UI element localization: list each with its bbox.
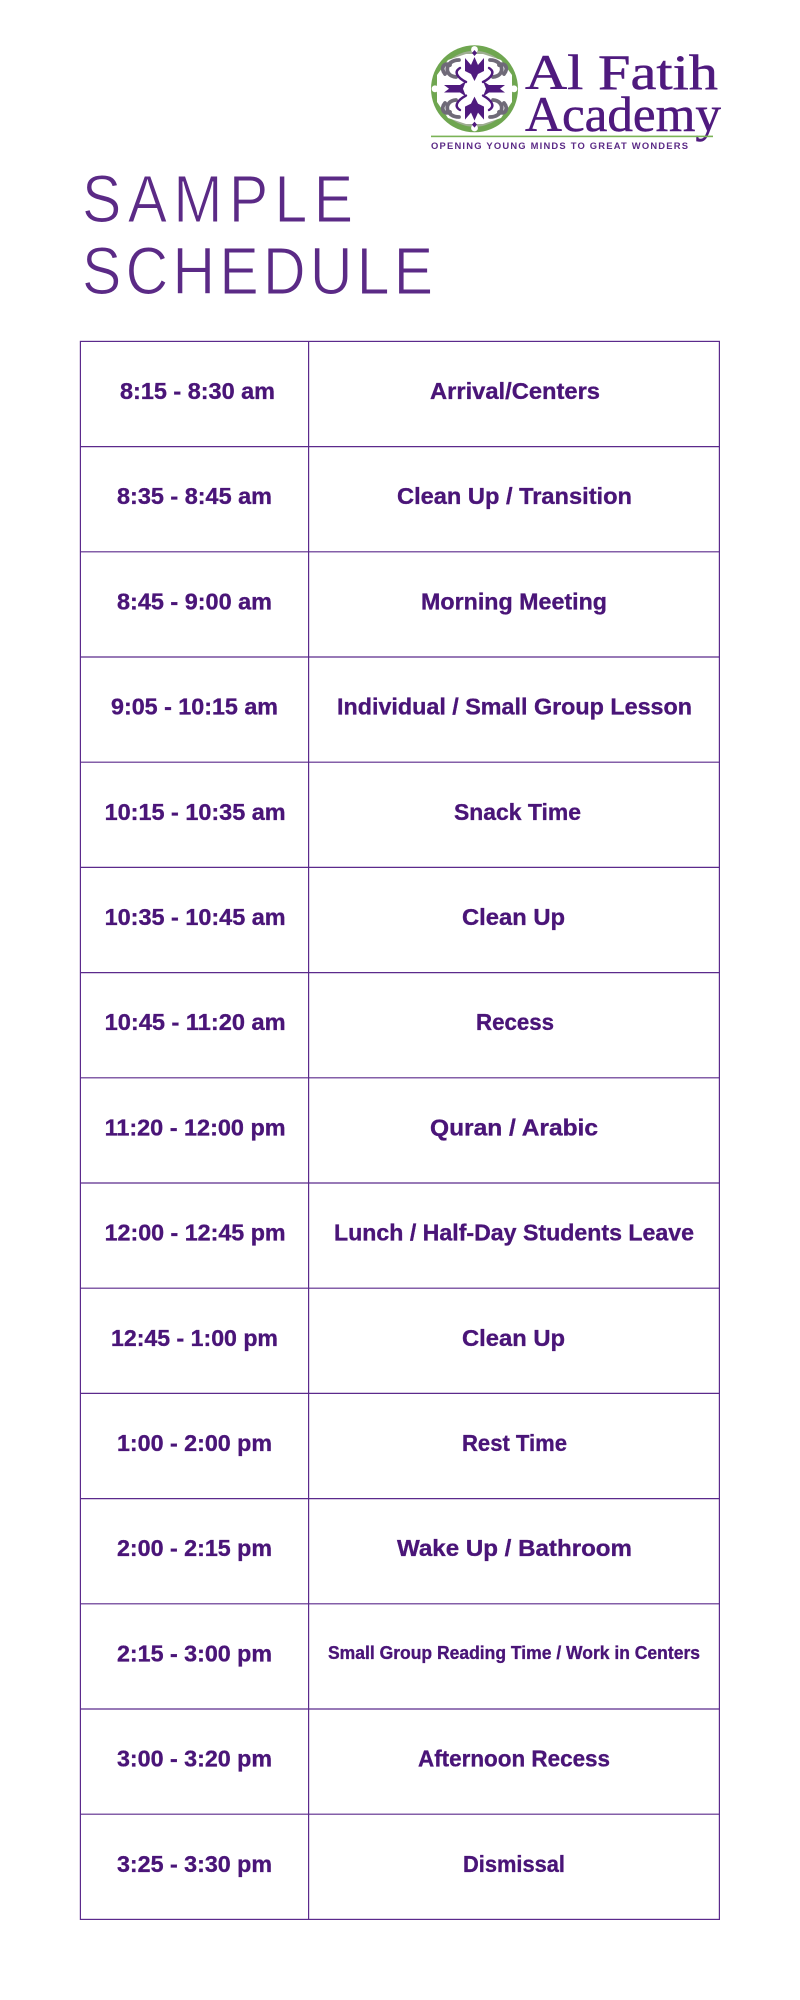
row 12: Wake Up / Bathroom [397,1535,632,1561]
row 7 [105,1009,554,1035]
row 3: 8:45 - 9:00 am [117,588,272,614]
row 1 [120,378,600,404]
schedule table [80,341,720,1920]
logo academy: Academy [525,86,721,142]
logo tagline: OPENING YOUNG MINDS TO GREAT WONDERS [431,140,688,151]
row 10: 12:45 - 1:00 pm [111,1325,278,1351]
row 6 [105,904,565,930]
row 3: Morning Meeting [421,588,607,614]
row 12: 2:00 - 2:15 pm [117,1535,272,1561]
row 14 [117,1746,610,1772]
row 9: Lunch / Half-Day Students Leave [334,1220,694,1246]
logo rule [431,136,713,137]
title: SAMPLE [82,163,353,237]
row 9: 12:00 - 12:45 pm [105,1220,286,1246]
row 10 [111,1325,565,1351]
row 2: Clean Up / Transition [397,483,632,509]
title: SCHEDULE [82,235,433,309]
row 5 [105,799,581,825]
row 10: Clean Up [462,1325,565,1351]
row 12 [117,1535,632,1561]
row 6: Clean Up [462,904,565,930]
row 11: Rest Time [462,1430,567,1456]
row 1: 8:15 - 8:30 am [120,378,275,404]
row 8: Quran / Arabic [430,1114,598,1140]
row 5: 10:15 - 10:35 am [105,799,286,825]
row 8 [105,1114,598,1140]
row 13 [117,1640,700,1666]
row 14: Afternoon Recess [418,1746,610,1772]
row 13: 2:15 - 3:00 pm [117,1640,272,1666]
row 2: 8:35 - 8:45 am [117,483,272,509]
row 7: Recess [476,1009,554,1035]
row 5: Snack Time [454,799,581,825]
row 11: 1:00 - 2:00 pm [117,1430,272,1456]
row 9 [105,1220,694,1246]
row 11 [117,1430,567,1456]
row 15: Dismissal [463,1851,565,1877]
title [82,163,433,309]
row 4 [111,694,692,720]
row 13: Small Group Reading Time / Work in Centers [328,1643,700,1663]
row 2 [117,483,632,509]
row 1: Arrival/Centers [430,378,600,404]
logo [431,44,721,151]
table grid [80,341,720,1920]
row 4: Individual / Small Group Lesson [337,694,692,720]
row 8: 11:20 - 12:00 pm [105,1114,286,1140]
icon: logo medallion [431,45,518,132]
logo name: Al Fatih [525,44,718,100]
row 14: 3:00 - 3:20 pm [117,1746,272,1772]
row 15 [117,1851,565,1877]
row 4: 9:05 - 10:15 am [111,694,278,720]
row 6: 10:35 - 10:45 am [105,904,286,930]
row 15: 3:25 - 3:30 pm [117,1851,272,1877]
row 7: 10:45 - 11:20 am [105,1009,286,1035]
row 3 [117,588,607,614]
